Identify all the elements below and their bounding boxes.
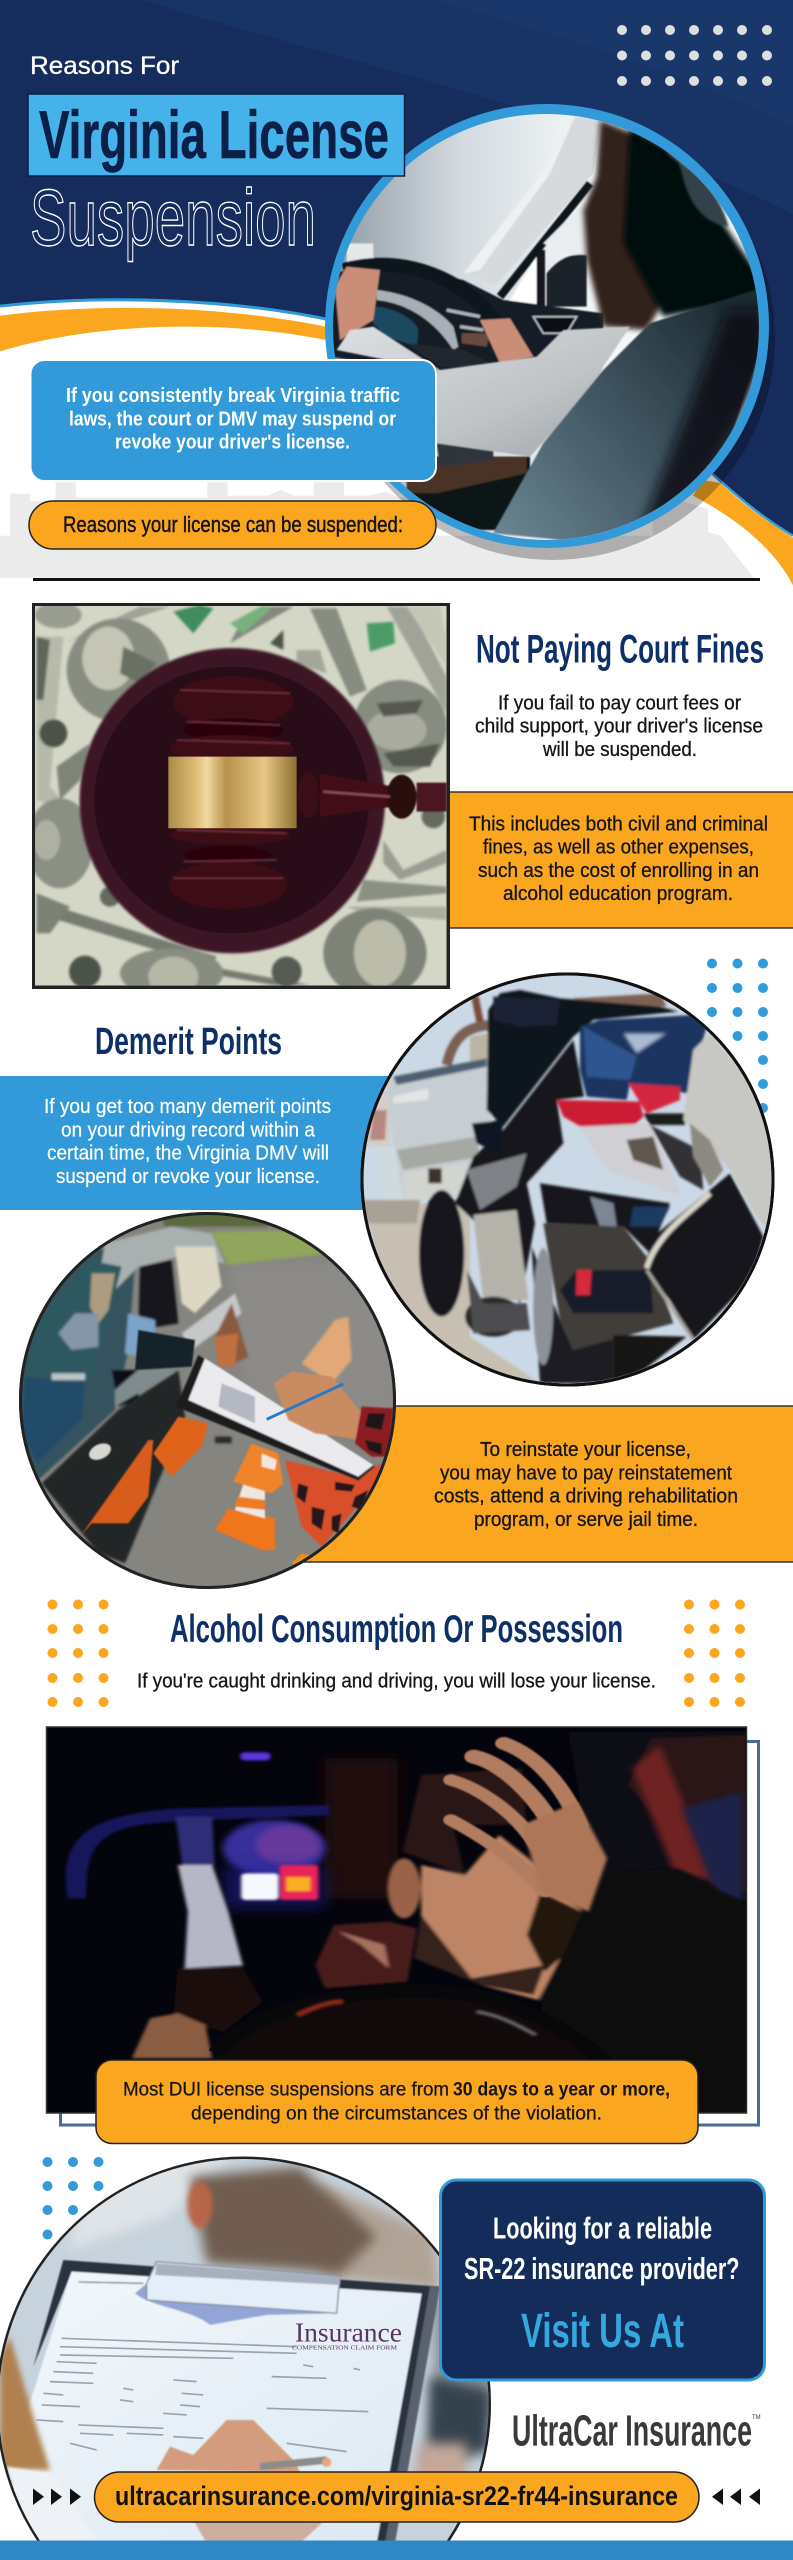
photo: gavel on money bbox=[27, 602, 450, 998]
URL pill bbox=[94, 2472, 699, 2522]
photo: insurance claim form: Insurance bbox=[295, 2318, 402, 2348]
orange callout: reinstate license: you may have to pay reinstatement bbox=[440, 1462, 732, 1484]
photo: crashed car bbox=[360, 970, 780, 1390]
CTA box: Visit Us At bbox=[521, 2305, 684, 2358]
decorative blue dots right bbox=[707, 958, 768, 1113]
URL pill: ultracarinsurance.com/virginia-sr22-fr44-insurance bbox=[115, 2481, 678, 2511]
header background bbox=[0, 0, 793, 590]
arrows right bbox=[712, 2488, 760, 2505]
title: Virginia License bbox=[28, 94, 404, 176]
logo: UltraCar Insurance: TM bbox=[752, 2415, 761, 2421]
photo: driving test clipboard bbox=[15, 1210, 402, 1597]
photo frame bbox=[60, 1742, 758, 2125]
blue band: demerit points text: suspend or revoke your license. bbox=[56, 1166, 320, 1188]
intro text box bbox=[30, 360, 436, 481]
blue band: demerit points text: on your driving record within a bbox=[61, 1120, 316, 1142]
photo: insurance claim form: COMPENSATION CLAIM FORM bbox=[292, 2344, 397, 2352]
reasons pill bbox=[29, 501, 436, 549]
orange callout: reinstate license: To reinstate your license, bbox=[480, 1439, 691, 1461]
intro text box: laws, the court or DMV may suspend or bbox=[69, 408, 396, 430]
orange callout: expenses: This includes both civil and criminal bbox=[469, 814, 768, 836]
intro text box: If you consistently break Virginia traffic bbox=[66, 385, 400, 407]
text: Reasons For: Reasons For bbox=[30, 52, 179, 80]
callout: DUI suspension length: 30 days to a year or more, bbox=[453, 2078, 670, 2100]
orange callout: expenses bbox=[450, 792, 793, 928]
blue band: demerit points text: If you get too many demerit points bbox=[44, 1096, 331, 1118]
section 1: not paying court fines bbox=[27, 602, 793, 998]
orange callout: reinstate license: program, or serve jail time. bbox=[474, 1509, 698, 1531]
decorative blue dots lower left bbox=[42, 2157, 104, 2240]
orange callout: expenses: alcohol education program. bbox=[503, 883, 733, 905]
text: drinking and driving: If you're caught drinking and driving, you will lose your license. bbox=[137, 1670, 656, 1692]
photo: woman driving bbox=[325, 104, 775, 560]
text: court fees: If you fail to pay court fees or bbox=[498, 692, 741, 714]
text: court fees: child support, your driver's license bbox=[475, 716, 763, 738]
reasons pill: Reasons your license can be suspended: bbox=[63, 512, 403, 537]
heading: Demerit Points: Demerit Points bbox=[95, 1021, 282, 1063]
callout: DUI suspension length: Most DUI license suspensions are from bbox=[123, 2078, 449, 2100]
photo: insurance claim form bbox=[0, 2150, 500, 2560]
callout: DUI suspension length bbox=[96, 2060, 698, 2144]
callout: DUI suspension length: depending on the circumstances of the violation. bbox=[191, 2102, 602, 2124]
orange callout: expenses: fines, as well as other expenses, bbox=[483, 836, 754, 858]
blue band: demerit points text: certain time, the Virginia DMV will bbox=[47, 1142, 329, 1164]
intro text box: revoke your driver's license. bbox=[115, 432, 350, 454]
blue band: demerit points text bbox=[0, 1076, 400, 1210]
orange callout: reinstate license: costs, attend a driving rehabilitation bbox=[434, 1486, 738, 1508]
decorative orange dots right bbox=[684, 1600, 745, 1707]
photo: drunk driver bbox=[46, 1727, 746, 2113]
title: Suspension outline: Suspension bbox=[30, 173, 316, 262]
decorative dots top right bbox=[617, 25, 772, 86]
CTA box bbox=[440, 2180, 764, 2380]
arrows left bbox=[33, 2488, 81, 2505]
orange callout: reinstate license bbox=[300, 1406, 793, 1562]
decorative orange dots left bbox=[48, 1600, 108, 1707]
title: Virginia License: Virginia License bbox=[39, 97, 389, 173]
text: court fees bbox=[475, 692, 763, 761]
orange callout: expenses: such as the cost of enrolling in an bbox=[478, 860, 759, 882]
footer bar bbox=[0, 2540, 793, 2560]
text: court fees: will be suspended. bbox=[542, 739, 697, 761]
